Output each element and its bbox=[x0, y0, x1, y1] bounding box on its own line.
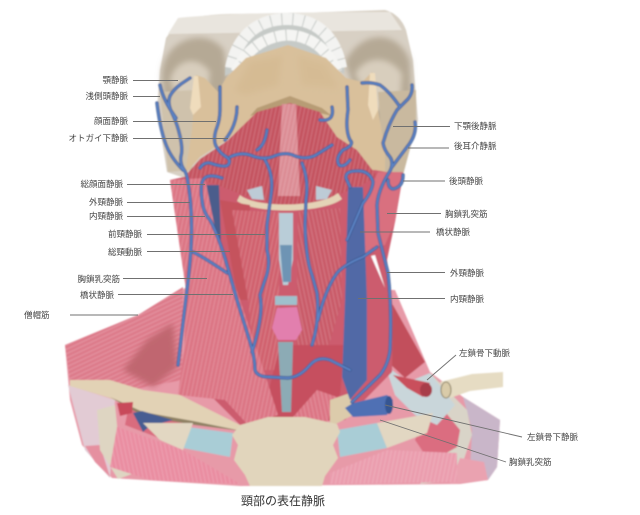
left subclavian artery, right side bbox=[393, 375, 430, 397]
right internal jugular bbox=[342, 187, 367, 400]
label: 胸鎖乳突筋: 胸鎖乳突筋 bbox=[509, 457, 552, 467]
illustration: neck anatomy bbox=[65, 10, 503, 486]
label: 僧帽筋 bbox=[24, 310, 138, 320]
label: 顎静脈: 顎静脈 bbox=[102, 75, 128, 85]
larynx bbox=[279, 213, 293, 285]
label: 後頭静脈 bbox=[403, 176, 484, 186]
label: 僧帽筋: 僧帽筋 bbox=[24, 310, 50, 320]
label: 胸鎖乳突筋: 胸鎖乳突筋 bbox=[77, 274, 120, 284]
label: 橋状静脈: 橋状静脈 bbox=[80, 290, 114, 300]
shoulders base bbox=[65, 285, 500, 486]
teeth bbox=[225, 13, 344, 76]
lower chest muscles bbox=[110, 427, 240, 484]
right SCM sternal stub bbox=[293, 390, 337, 423]
label: 外頸静脈: 外頸静脈 bbox=[89, 197, 123, 207]
label: 下顎後静脈 bbox=[393, 121, 497, 131]
strap muscles bbox=[232, 210, 280, 370]
left outer shoulder bbox=[68, 385, 115, 478]
label: 胸鎖乳突筋: 胸鎖乳突筋 bbox=[445, 209, 488, 219]
right labels bbox=[358, 121, 579, 467]
left labels bbox=[24, 75, 265, 320]
label: 後耳介静脈 bbox=[408, 141, 497, 151]
label: 胸鎖乳突筋 bbox=[77, 274, 207, 284]
label: 総顔面静脈: 総顔面静脈 bbox=[80, 179, 123, 189]
title: 頸部の表在静脈 bbox=[241, 493, 325, 508]
label: 胸鎖乳突筋 bbox=[387, 209, 488, 219]
label: 前頸静脈: 前頸静脈 bbox=[108, 229, 142, 239]
label: 総頸動脈 bbox=[108, 247, 230, 257]
label: 外頸静脈: 外頸静脈 bbox=[450, 268, 485, 278]
hyoid bbox=[237, 193, 342, 211]
neck base bbox=[170, 170, 403, 425]
trapezius left bbox=[65, 287, 183, 390]
label: 外頸静脈 bbox=[387, 268, 485, 278]
left subclavian vein bbox=[133, 411, 173, 432]
label: 後頭静脈: 後頭静脈 bbox=[449, 176, 484, 186]
label: 後耳介静脈: 後耳介静脈 bbox=[454, 141, 497, 151]
gap beside right SCM bbox=[371, 255, 385, 288]
floor of mouth bbox=[185, 103, 377, 208]
trapezius hollow bbox=[123, 323, 177, 387]
label: 左鎖骨下動脈: 左鎖骨下動脈 bbox=[459, 348, 511, 358]
right subclavian vein bbox=[345, 395, 393, 417]
label: 浅側頭静脈: 浅側頭静脈 bbox=[85, 91, 128, 101]
deep neck shadow bbox=[203, 185, 221, 240]
clavicle stub right bbox=[440, 372, 503, 398]
left SCM bbox=[170, 178, 278, 425]
label: 浅側頭静脈 bbox=[85, 91, 160, 101]
right deep shoulder muscle bbox=[362, 290, 425, 378]
label: 顔面静脈: 顔面静脈 bbox=[94, 116, 128, 126]
left clavicle bbox=[70, 380, 245, 432]
veins bbox=[157, 78, 415, 402]
label: 総頸動脈: 総頸動脈 bbox=[108, 247, 142, 257]
label: 左鎖骨下動脈 bbox=[427, 348, 511, 380]
left first rib bbox=[97, 405, 143, 479]
label: 橋状静脈: 橋状静脈 bbox=[436, 227, 471, 237]
label: 内頸静脈: 内頸静脈 bbox=[450, 294, 485, 304]
label: 橋状静脈 bbox=[360, 227, 471, 237]
label: 外頸静脈 bbox=[89, 197, 190, 207]
label: 左鎖骨下静脈: 左鎖骨下静脈 bbox=[527, 432, 579, 442]
right outer shoulder bbox=[463, 397, 500, 480]
label: 胸鎖乳突筋 bbox=[380, 420, 552, 467]
left subclavian artery bbox=[117, 402, 133, 416]
label: オトガイ下静脈: オトガイ下静脈 bbox=[68, 133, 128, 143]
label: 左鎖骨下静脈 bbox=[385, 405, 579, 442]
skull bbox=[157, 10, 418, 180]
label: 顔面静脈 bbox=[94, 116, 216, 126]
costal cartilage bbox=[183, 427, 233, 457]
right SCM bbox=[352, 172, 403, 248]
thyroid bbox=[272, 307, 302, 340]
label: 総顔面静脈 bbox=[80, 179, 205, 189]
styloid processes bbox=[190, 76, 201, 115]
label: 内頸静脈 bbox=[89, 211, 205, 221]
label: 下顎後静脈: 下顎後静脈 bbox=[454, 121, 497, 131]
right clavicle stub bbox=[330, 393, 353, 427]
label: 顎静脈 bbox=[102, 75, 178, 85]
mandible bbox=[185, 45, 385, 176]
sternum bbox=[232, 417, 340, 486]
label: 内頸静脈: 内頸静脈 bbox=[89, 211, 123, 221]
label: 内頸静脈 bbox=[358, 294, 485, 304]
trachea bbox=[278, 342, 293, 412]
